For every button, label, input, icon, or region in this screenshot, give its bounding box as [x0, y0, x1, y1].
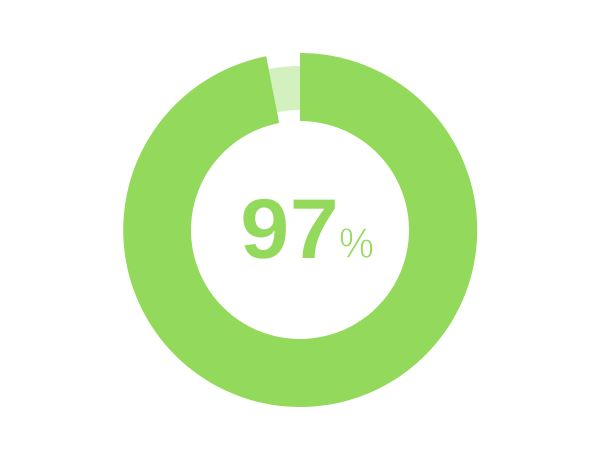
value label: 97: 97 [240, 182, 339, 277]
percent sign: % [339, 220, 374, 268]
remaining 3 percent segment [269, 66, 300, 112]
main 97 percent arc [123, 53, 477, 407]
